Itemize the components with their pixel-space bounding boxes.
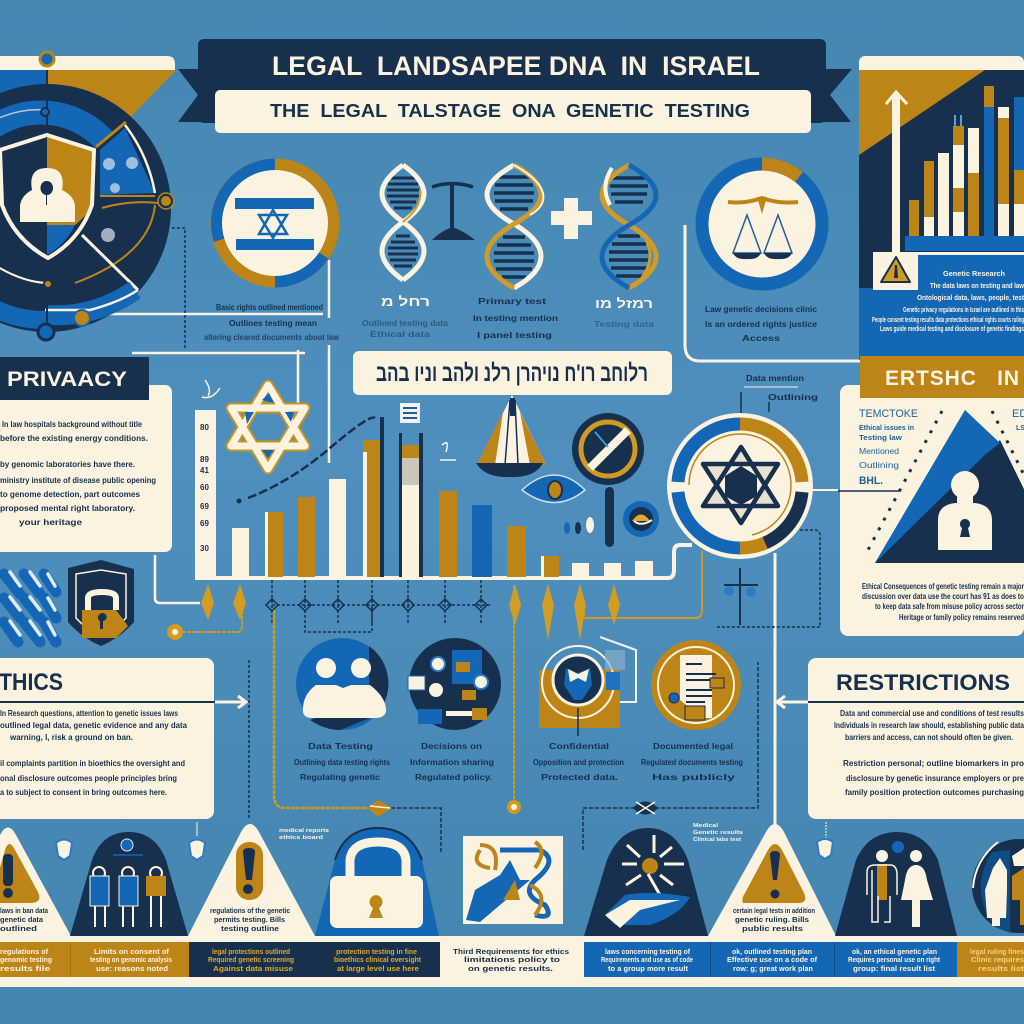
- triangle: warning one: genetic data: [0, 917, 43, 924]
- axis numbers: 30: [200, 544, 209, 553]
- dna twist pattern: [4, 572, 56, 642]
- bottom text: [862, 582, 1024, 622]
- text: icon captions: [294, 742, 743, 782]
- band text: Effective use on a code of: [727, 957, 818, 964]
- medallions: [56, 822, 833, 860]
- text: icon captions: Regulated documents testing: [641, 758, 743, 767]
- axis numbers: 89: [200, 455, 209, 464]
- triangle: warning three: [708, 824, 836, 936]
- text: scale caption: Law genetic decisions clinic: [705, 305, 818, 314]
- arrow: [777, 696, 808, 708]
- band text: protection testing in fine: [336, 949, 417, 956]
- triangle: warning two: [188, 824, 315, 936]
- band text: legal ruling fines: [970, 949, 1024, 956]
- privacy shield wheel: [0, 52, 176, 340]
- icon: justice scale circle: [702, 164, 822, 284]
- icon: DNA helix three: [602, 165, 656, 288]
- paragraph: ministry institute of disease public opening: [0, 476, 156, 485]
- icon: pyramid scale: [476, 395, 546, 477]
- panel: ethics: [0, 658, 246, 819]
- paragraph: a to subject to consent in bring outcomes here.: [0, 788, 167, 797]
- connector from star to ethics: [812, 490, 900, 491]
- band text: [0, 949, 1024, 973]
- text: flag caption: altering cleared documents about law: [204, 333, 340, 342]
- axis numbers: 69: [200, 519, 209, 528]
- triangle with person: [868, 410, 1024, 563]
- left column text: TEMCTOKE: [859, 408, 918, 420]
- paragraph: your heritage: [19, 518, 83, 527]
- text: DNA captions: Outlined testing data: [362, 319, 449, 328]
- text: flag caption: Outlines testing mean: [229, 319, 317, 328]
- band text: laws concerning testing of: [605, 949, 691, 956]
- text: DNA captions: Primary test: [478, 297, 546, 306]
- paragraph: proposed mental right laboratory.: [0, 504, 135, 513]
- axis numbers: [200, 423, 209, 553]
- band text: on genetic results.: [468, 966, 553, 973]
- blue panel text: [872, 271, 1024, 333]
- text: flag caption: [204, 303, 340, 342]
- icon: DNA helix one: [382, 165, 424, 280]
- blue panel text: Genetic Research: [943, 271, 1005, 278]
- band text: Third Requirements for ethics: [453, 949, 569, 956]
- small caption: [279, 828, 329, 841]
- title: LEGAL LANDSAPEE DNA IN ISRAEL: [272, 51, 760, 81]
- icon: Israeli flag circle: [217, 165, 333, 281]
- triangle: warning three: certain legal tests in addition: [733, 908, 815, 915]
- text: DNA captions: [362, 294, 655, 340]
- left column text: [859, 408, 1024, 487]
- text: icon captions: Confidential: [549, 742, 609, 751]
- text: star labels: Outlining: [768, 393, 818, 402]
- text: scale caption: Is an ordered rights justice: [705, 320, 818, 329]
- gold star connector: [367, 800, 658, 817]
- panel: ethics right: [840, 356, 1024, 636]
- band text: genomic testing: [0, 957, 52, 964]
- icon: data circle: [408, 638, 501, 730]
- icon: small navy scale: [432, 184, 475, 240]
- hebrew banner: [353, 351, 672, 395]
- icon: shield medallion: [539, 637, 636, 736]
- text: scale caption: [705, 305, 818, 343]
- paragraph: outlined legal data, genetic evidence and any data: [0, 721, 188, 730]
- paragraph: [834, 709, 1024, 797]
- band text: row: g; great work plan: [733, 966, 813, 973]
- text: scale caption: Access: [742, 334, 781, 343]
- text: icon captions: Has publicly: [652, 773, 736, 782]
- small caption: Genetic results: [693, 830, 743, 836]
- text: icon captions: Opposition and protection: [533, 758, 624, 767]
- band text: ok, outlined testing plan: [732, 949, 812, 956]
- band text: Requires personal use on right: [848, 957, 941, 964]
- band text: ok, an ethical genetic plan: [852, 949, 937, 956]
- hebrew banner: רלוחב רו'ח נויהרן רלנ ולהב וניו בהב: [376, 360, 648, 387]
- text: icon captions: Decisions on: [421, 742, 482, 751]
- paragraph: by genomic laboratories have there.: [0, 460, 135, 469]
- text: DNA captions: Ethical data: [370, 330, 431, 339]
- axis panel: [195, 410, 216, 580]
- paragraph: onal disclosure outcomes people principles bring: [0, 774, 177, 783]
- paragraph: In law hospitals background without title: [2, 420, 142, 429]
- text: DNA captions: Testing data: [594, 320, 655, 329]
- heading: THICS: [0, 669, 63, 696]
- heading: PRIVAACY: [7, 368, 127, 391]
- band text: results file: [0, 966, 50, 973]
- circle: people: [972, 839, 1024, 933]
- paragraph: before the existing energy conditions.: [0, 434, 148, 443]
- bell: sun and hand: [584, 828, 708, 936]
- band text: Clinic requires: [971, 957, 1024, 964]
- small glyph marks: [202, 380, 456, 460]
- text: DNA captions: In testing mention: [473, 314, 558, 323]
- band text: bioethics clinical oversight: [334, 957, 422, 964]
- triangle: warning two: permits testing. Bills: [214, 917, 285, 924]
- left column text: BHL.: [859, 475, 883, 487]
- paragraph: to genome detection, part outcomes: [0, 490, 141, 499]
- band text: Requirements and use as of code: [601, 957, 693, 964]
- navy chain nodes: [266, 599, 487, 611]
- icon: lock shield: [68, 560, 134, 646]
- heading: RESTRICTIONS: [836, 670, 1010, 695]
- paragraph: family position protection outcomes purchasing: [845, 788, 1024, 797]
- title banner: [178, 39, 852, 133]
- band text: testing on genomic analysis: [90, 957, 172, 964]
- subtitle: THE LEGAL TALSTAGE ONA GENETIC TESTING: [270, 101, 750, 121]
- connector lines: [110, 225, 880, 852]
- blue text area: [918, 255, 1024, 360]
- band text: results list: [978, 966, 1024, 973]
- left column text: Mentioned: [859, 447, 899, 456]
- bars: [905, 86, 1024, 251]
- text: icon captions: Documented legal: [653, 742, 733, 751]
- left column text: Outlining: [859, 461, 899, 470]
- text: DNA captions: I panel testing: [477, 331, 552, 340]
- band text: regulations of: [0, 949, 49, 956]
- band text: Required genetic screening: [208, 957, 294, 964]
- triangle: warning two: regulations of the genetic: [210, 908, 290, 915]
- paragraph: Restriction personal; outline biomarkers in pro: [843, 759, 1024, 768]
- axis numbers: 69: [200, 502, 209, 511]
- band text: legal protections outlined: [212, 949, 290, 956]
- axis numbers: 60: [200, 483, 209, 492]
- bell: three figures: [70, 832, 188, 936]
- gold chain nodes: [167, 584, 620, 640]
- bottom cream strip: [0, 936, 1024, 987]
- paragraph: In Research questions, attention to genetic issues laws: [0, 709, 178, 718]
- triangle: warning three: public results: [742, 926, 803, 933]
- icon: small balance: [724, 568, 758, 625]
- triangle: warning one: laws in ban data: [0, 908, 48, 915]
- text: DNA captions: רחל מ: [381, 294, 430, 309]
- band text: Against data misuse: [213, 966, 293, 973]
- panel: restrictions: [777, 658, 1024, 819]
- text: DNA captions: רמזל מו: [595, 296, 653, 311]
- band text: group: final result list: [853, 966, 936, 973]
- shield: [0, 135, 94, 258]
- text: icon captions: Regulated policy.: [415, 773, 492, 782]
- bell: padlock: [315, 828, 439, 936]
- paragraph: warning, I, risk a ground on ban.: [9, 733, 133, 742]
- icon: star of David gold: [231, 385, 305, 469]
- axis numbers: 41: [200, 466, 209, 475]
- small flower glyphs: [101, 157, 138, 242]
- icon: warning: [873, 252, 918, 290]
- icon: DNA helix two: [487, 165, 543, 288]
- icon: prohibited magnifier: [572, 413, 644, 547]
- text: icon captions: Data Testing: [308, 742, 373, 751]
- paragraph: [0, 420, 156, 527]
- axis numbers: 80: [200, 423, 209, 432]
- triangle: warning one: [0, 828, 71, 936]
- small caption: [693, 823, 743, 843]
- band text: at large level use here: [337, 966, 419, 973]
- paragraph: [0, 709, 188, 797]
- band text: Limits on consent of: [94, 949, 170, 956]
- small caption: Clinical labs test: [693, 837, 741, 843]
- bell: couple: [835, 832, 957, 936]
- triangle: warning three: genetic ruling. Bills: [735, 917, 809, 924]
- left column text: Testing law: [859, 435, 903, 442]
- paragraph: il complaints partition in bioethics the oversight and: [0, 759, 185, 768]
- text: icon captions: Protected data.: [541, 773, 618, 782]
- text: flag caption: Basic rights outlined mentioned: [216, 303, 323, 312]
- panel: top right bar chart: [859, 56, 1024, 360]
- text: star labels: Data mention: [746, 374, 804, 383]
- left column text: Ethical issues in: [859, 425, 914, 432]
- panel: privacy: [0, 357, 172, 552]
- triangle: warning one: outlined: [0, 926, 37, 933]
- nodes: [38, 52, 174, 340]
- bars: [232, 417, 653, 577]
- band text: limitations policy to: [464, 957, 560, 964]
- small dots and gauge: [564, 501, 659, 537]
- trend line: [236, 418, 375, 504]
- image: helix hand: [463, 836, 563, 924]
- icon: people circle: [296, 638, 388, 730]
- text: icon captions: Regulating genetic: [300, 773, 381, 782]
- arrow: [215, 696, 246, 708]
- band: colored strip: [0, 942, 1024, 977]
- small caption: Medical: [693, 823, 719, 829]
- heading: ERTSHC IN: [885, 367, 1019, 390]
- arrow: [886, 92, 907, 253]
- icon: document circle: [651, 640, 741, 730]
- icon: plus: [551, 198, 592, 239]
- band text: use: reasons noted: [96, 966, 168, 973]
- icon: central star circle: [667, 413, 813, 559]
- icon: padlock: [20, 168, 75, 222]
- small caption: medical reports: [279, 828, 329, 834]
- band text: to a group more result: [608, 966, 689, 973]
- chart: central bar chart: [195, 403, 692, 580]
- note icon: [400, 403, 420, 423]
- icon: eye: [522, 475, 585, 502]
- text: icon captions: Outlining data testing rights: [294, 758, 390, 767]
- small caption: ethics board: [279, 835, 323, 841]
- triangle: warning two: testing outline: [221, 926, 279, 933]
- text: star labels: [741, 374, 818, 413]
- text: icon captions: Information sharing: [410, 758, 494, 767]
